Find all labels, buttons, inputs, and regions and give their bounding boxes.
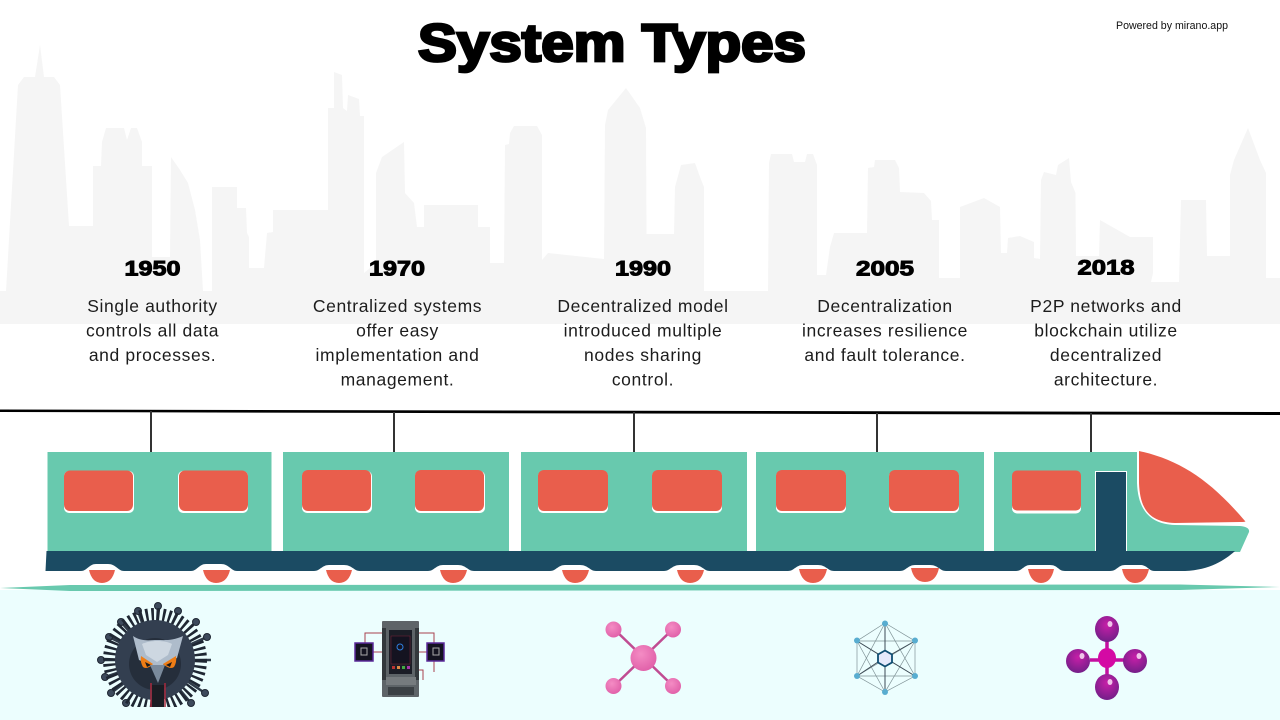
description 1950: Single authority xyxy=(87,296,218,316)
year 2005: 2005 xyxy=(856,258,914,280)
description 2005: Decentralization xyxy=(817,296,953,316)
car 1 xyxy=(48,452,272,551)
description 1950: controls all data xyxy=(86,320,219,340)
description 1970: implementation and xyxy=(316,345,479,365)
credit: powered by: Powered by mirano.app xyxy=(1116,20,1228,32)
milestone 1970 xyxy=(313,258,482,390)
description 2005: increases resilience xyxy=(802,320,968,340)
description 1990: introduced multiple xyxy=(564,320,722,340)
description 1990: nodes sharing xyxy=(584,345,702,365)
year 2018: 2018 xyxy=(1078,256,1135,280)
year 1990: 1990 xyxy=(615,258,671,280)
description 1970: Centralized systems xyxy=(313,296,482,316)
description 2018: P2P networks and xyxy=(1030,296,1182,316)
year 1950: 1950 xyxy=(124,258,180,280)
milestone 1950 xyxy=(86,258,219,365)
description 1990: Decentralized model xyxy=(557,296,729,316)
track xyxy=(0,584,1280,591)
undercarriage xyxy=(46,551,1235,571)
background skyline xyxy=(0,45,1280,324)
car 4 xyxy=(756,452,984,551)
icon: owl xyxy=(98,602,211,707)
description 2018: blockchain utilize xyxy=(1034,320,1178,340)
description 2005: and fault tolerance. xyxy=(804,345,966,365)
description 1950: and processes. xyxy=(89,345,216,365)
icon: pink decentralized molecule xyxy=(606,622,681,694)
icon: purple molecule xyxy=(1066,616,1147,700)
description 1990: control. xyxy=(612,370,674,390)
year 1970: 1970 xyxy=(369,258,425,280)
description 1970: management. xyxy=(341,370,454,390)
milestone 2018 xyxy=(1030,256,1182,390)
ground band xyxy=(0,590,1280,720)
icon: server with chips xyxy=(355,621,444,697)
car 3 xyxy=(521,452,747,551)
title: System Types xyxy=(418,14,806,73)
description 1970: offer easy xyxy=(356,320,439,340)
overhead wire and hangers xyxy=(0,410,1280,452)
description 2018: architecture. xyxy=(1054,370,1158,390)
locomotive xyxy=(994,451,1249,552)
wheels xyxy=(89,568,1149,583)
train xyxy=(46,451,1249,583)
icon: hexagon network xyxy=(854,620,918,695)
milestone 1990 xyxy=(557,258,729,390)
description 2018: decentralized xyxy=(1050,345,1162,365)
car 2 xyxy=(283,452,509,551)
milestone 2005 xyxy=(802,258,968,365)
